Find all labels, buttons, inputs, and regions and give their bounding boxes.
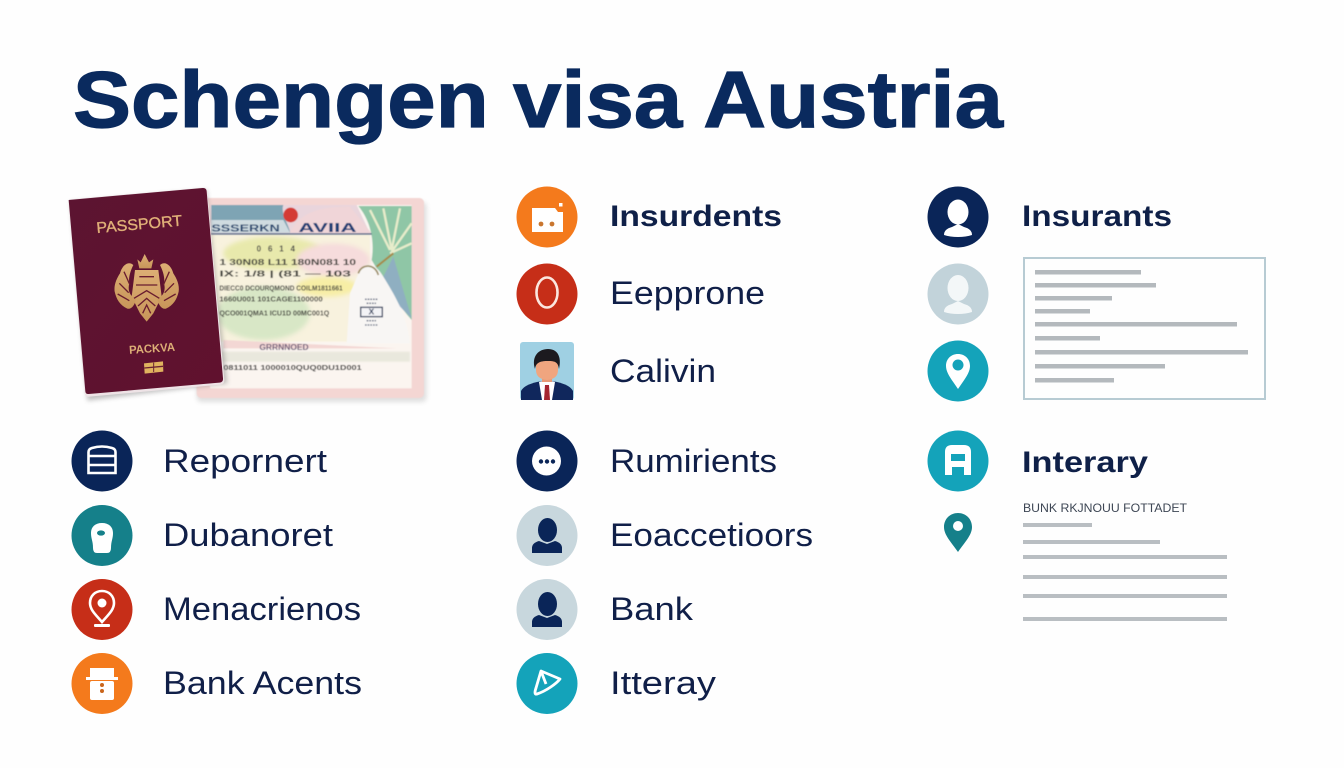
icon: person xyxy=(516,579,578,640)
icon: navy box xyxy=(72,430,132,492)
label: Itteray xyxy=(610,665,716,701)
visa card: AVIIA xyxy=(298,220,358,235)
title: Schengen visa Austria xyxy=(73,55,1004,144)
icon: navy person xyxy=(928,186,988,248)
item: Dubanoret xyxy=(72,505,333,566)
item: Calivin xyxy=(520,342,716,400)
label: Eepprone xyxy=(610,275,765,311)
heading group: Interary xyxy=(928,430,1148,492)
passport cover text: PASSPORT xyxy=(96,213,184,237)
icon: cyan pin xyxy=(928,340,988,402)
label: Dubanoret xyxy=(163,517,333,553)
text block: bank lines: BUNK RKJNOUU FOTTADET xyxy=(1023,503,1187,515)
label: Bank Acents xyxy=(163,665,362,701)
item: Menacrienos xyxy=(72,579,361,640)
visa card: IX: 1/8 | (81 — 103 xyxy=(219,270,352,279)
icon: teal bulb xyxy=(72,505,132,566)
label: Rumirients xyxy=(610,443,777,479)
illustration: passport and visa xyxy=(68,188,427,402)
icon: orange calendar xyxy=(516,186,578,248)
icon: red ring xyxy=(516,264,578,324)
icon: cyan pen xyxy=(516,653,578,714)
icon: portrait photo xyxy=(520,342,574,400)
passport chip xyxy=(144,361,163,374)
heading: Interary xyxy=(1022,446,1148,479)
item: Itteray xyxy=(516,653,716,714)
visa card: 1660U001 101CAGE1100000 xyxy=(219,294,323,303)
heading: Insurdents xyxy=(610,200,782,233)
visa card: X xyxy=(368,307,374,317)
item: Insurdents xyxy=(516,186,782,248)
passport booklet xyxy=(68,188,227,401)
visa card: GRRNNOED xyxy=(259,343,309,352)
icon: cyan building xyxy=(928,430,988,492)
visa card: DIECC0 DCOURQMOND COILM1811661 xyxy=(219,284,343,293)
item: Rumirients xyxy=(516,430,777,492)
visa card: 0811011 1000010QUQ0DU1D001 xyxy=(223,363,362,372)
label: Bank xyxy=(610,591,694,627)
visa card: 1 30N08 L11 180N081 10 xyxy=(219,258,357,267)
item: Bank Acents xyxy=(72,653,362,714)
visa card: 0 6 1 4 xyxy=(257,244,296,253)
icon: red pin xyxy=(72,579,132,640)
label: Repornert xyxy=(163,443,327,479)
column 2 list xyxy=(516,186,813,714)
text block: bank lines xyxy=(1023,503,1227,621)
label: Calivin xyxy=(610,353,716,389)
icon: orange box xyxy=(72,653,132,714)
item: Repornert xyxy=(72,430,327,492)
icon: person xyxy=(516,505,578,566)
icon: teal pin xyxy=(944,513,972,552)
heading group: Insurants xyxy=(928,186,1172,248)
heading: Insurants xyxy=(1022,200,1172,233)
label: Eoaccetioors xyxy=(610,517,813,553)
column 3 xyxy=(928,186,1265,621)
item: Eepprone xyxy=(516,264,765,324)
item: Bank xyxy=(516,579,694,640)
item: Eoaccetioors xyxy=(516,505,813,566)
passport emblem xyxy=(114,254,179,322)
column 1 list xyxy=(72,430,362,714)
visa card: SSSERKN xyxy=(211,223,280,234)
document panel xyxy=(1024,258,1265,399)
icon: pale person xyxy=(928,264,988,324)
icon: navy dots xyxy=(516,430,578,492)
label: Menacrienos xyxy=(163,591,361,627)
passport booklet: PACKVA xyxy=(129,341,176,357)
visa card: QCO001QMA1 ICU1D 00MC001Q xyxy=(219,308,330,317)
visa card xyxy=(197,198,427,402)
